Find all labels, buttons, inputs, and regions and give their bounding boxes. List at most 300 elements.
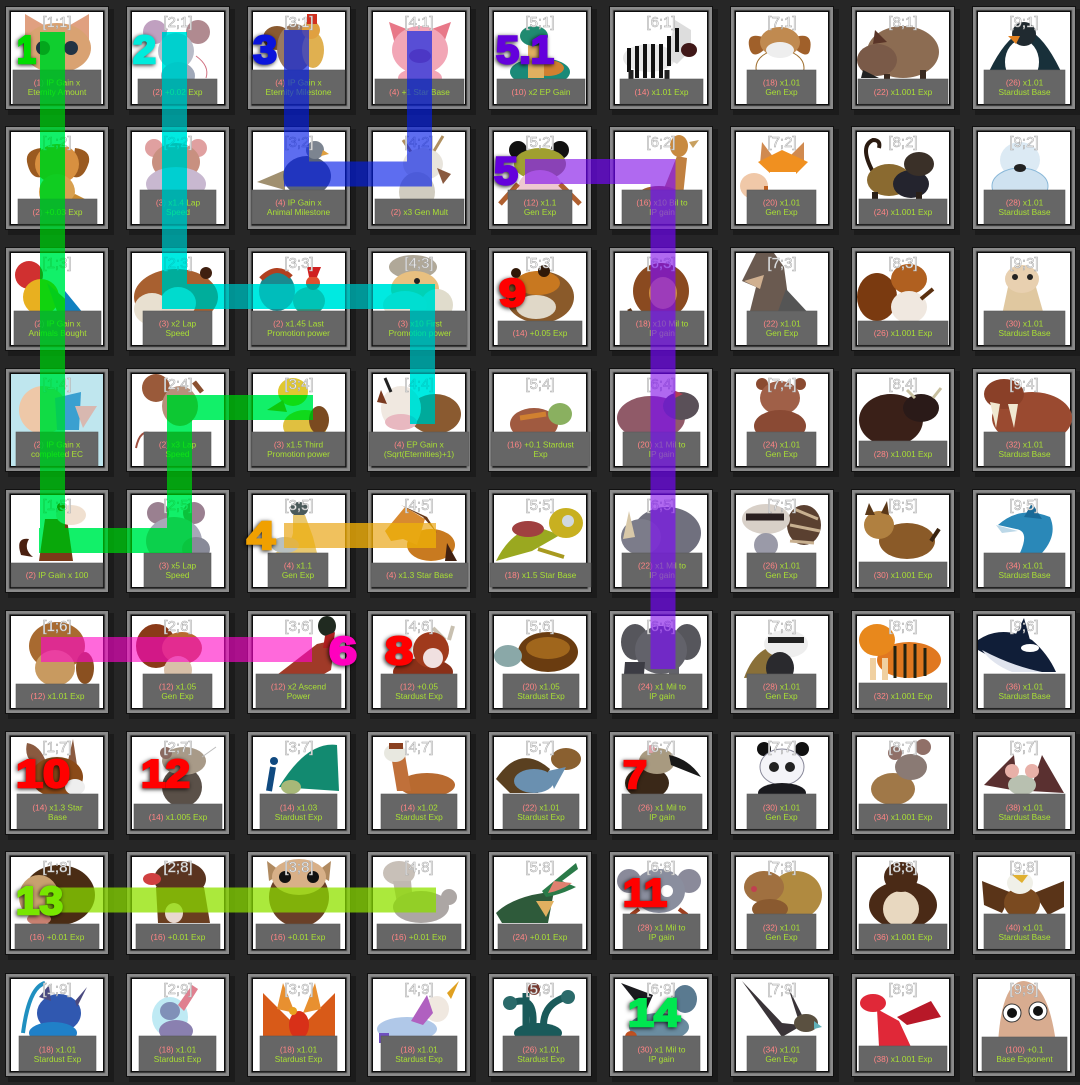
caption: (12) x2 Ascend: [271, 682, 327, 692]
icon: panda: [757, 742, 809, 803]
icon: giraffe: [639, 135, 699, 202]
cell [1;5]: ferret: [6, 490, 114, 598]
icon: chicken: [263, 14, 324, 72]
caption: Gen Exp: [766, 328, 799, 338]
cell [7;1]: rabbit: [730, 6, 839, 115]
cell [7;5]: raccoon: [730, 490, 839, 598]
caption: (26) x1 Mil to: [638, 802, 686, 812]
caption: (16) +0.01 Exp: [271, 932, 326, 942]
index: [7;1]: [767, 14, 797, 31]
index: [8;1]: [888, 14, 918, 31]
caption: IP gain: [649, 328, 675, 338]
index: [4;7]: [404, 739, 434, 756]
index: [8;4]: [888, 376, 918, 393]
icon: lion: [629, 263, 689, 319]
cell [2;7]: rat: [126, 732, 235, 840]
cell [7;2]: fox: [730, 126, 839, 235]
icon: rhino: [621, 507, 701, 559]
cell [1;6]: chipmunk: [6, 610, 114, 719]
caption: (2) +0.02 Exp: [152, 87, 203, 97]
caption: Stardust Exp: [395, 812, 443, 822]
caption: (1) IP Gain x: [34, 78, 81, 88]
caption: Stardust Base: [998, 570, 1051, 580]
icon: tiger: [859, 624, 941, 680]
caption: [984, 190, 1065, 224]
icon: toad: [506, 265, 574, 323]
caption: IP gain: [649, 932, 675, 942]
icon: walrus: [984, 379, 1072, 444]
cell [1;9]: blue cat: [6, 974, 114, 1082]
cell [9;1]: penguin: [972, 6, 1080, 115]
caption: (24) x1 Mil to: [638, 682, 686, 692]
index: [3;9]: [284, 981, 314, 998]
icon: fish: [11, 374, 103, 466]
caption: (22) x1 Mil to: [638, 560, 686, 570]
cell [6;8]: koala: [610, 852, 718, 960]
caption: [252, 70, 345, 104]
icon: blue cat: [23, 983, 87, 1044]
caption: [622, 674, 702, 708]
icon: seal: [1002, 265, 1044, 315]
caption: [984, 432, 1065, 466]
index: [2;7]: [163, 739, 193, 756]
cell [5;6]: tortoise: [488, 610, 597, 719]
path 1: green route: [39, 32, 313, 553]
caption: [747, 70, 816, 104]
icon: pig: [389, 22, 451, 88]
cell [1;1]: cat: [6, 6, 114, 115]
cell [3;9]: phoenix: [248, 974, 356, 1082]
caption: (24) x1.01: [763, 440, 801, 450]
cell [5;9]: hydra: [488, 974, 597, 1082]
index: [6;2]: [646, 134, 676, 151]
caption: IP gain: [649, 207, 675, 217]
cell [7;9]: griffin: [730, 974, 839, 1082]
caption: (3) x10 First: [398, 318, 443, 328]
index: [9;8]: [1009, 859, 1039, 876]
cell [7;4]: bear: [730, 368, 839, 477]
index: [9;5]: [1009, 497, 1039, 514]
index: [6;7]: [646, 739, 676, 756]
caption: Gen Exp: [282, 570, 315, 580]
index: [2;9]: [163, 981, 193, 998]
caption: Stardust Exp: [517, 812, 565, 822]
path 6: magenta route: [41, 637, 312, 662]
caption: (18) x1.01: [280, 1044, 318, 1054]
caption: (32) x1.01: [1006, 440, 1044, 450]
caption: (22) x1.01: [522, 802, 560, 812]
cell [3;4]: duck: [248, 368, 356, 477]
caption: (26) x1.01: [763, 560, 801, 570]
icon: mouse: [136, 374, 202, 448]
cell [5;5]: chameleon: [488, 490, 597, 598]
index: [5;3]: [525, 255, 555, 272]
cell [8;3]: squirrel: [852, 248, 960, 356]
icon: guinea pig: [134, 267, 218, 325]
cell [8;8]: gorilla: [852, 852, 960, 960]
path 2: cyan route: [174, 32, 422, 424]
caption: [16, 432, 98, 466]
index: [3;4]: [284, 376, 314, 393]
caption: Stardust Exp: [395, 691, 443, 701]
caption: [381, 1036, 457, 1071]
index: [4;8]: [404, 859, 434, 876]
index: [2;8]: [163, 859, 193, 876]
icon: hyena: [871, 739, 931, 805]
caption: [622, 190, 702, 224]
caption: (2) IP Gain x 100: [26, 570, 89, 580]
cell [4;9]: unicorn: [368, 974, 476, 1082]
icon: bat: [984, 755, 1064, 795]
cell [6;2]: giraffe: [610, 126, 718, 235]
caption: [381, 794, 457, 829]
index: [5;5]: [525, 497, 555, 514]
cell [5;7]: lizard: [488, 732, 597, 840]
caption: [13, 70, 101, 104]
caption: [373, 311, 467, 345]
icon: pigeon: [257, 141, 331, 196]
caption: (30) x1.001 Exp: [874, 570, 933, 580]
icon: polar bear: [992, 142, 1048, 204]
caption: Stardust Exp: [395, 1054, 443, 1064]
index: [3;5]: [284, 497, 314, 514]
caption: Base Exponent: [996, 1054, 1053, 1064]
caption: (4) x1.3 Star Base: [386, 570, 453, 580]
path 4: orange route: [284, 523, 436, 548]
caption: (16) x10 Bil to: [636, 198, 688, 208]
caption: Promotion power: [389, 328, 452, 338]
icon: hippo: [617, 390, 699, 440]
caption: (18) x1.01: [763, 78, 801, 88]
index: [8;7]: [888, 739, 918, 756]
caption: Stardust Base: [998, 87, 1051, 97]
index: [4;2]: [404, 134, 434, 151]
caption: (3) x2 Lap: [159, 318, 197, 328]
cell [4;4]: cow: [368, 368, 476, 477]
caption: (2) IP Gain x: [34, 318, 82, 328]
icon: griffin: [742, 981, 822, 1037]
caption: [984, 311, 1065, 345]
caption: (12) x1.01 Exp: [31, 691, 85, 701]
cell [3;1]: chicken: [248, 6, 356, 115]
path 13: lime route: [45, 888, 436, 912]
icon: hare: [26, 739, 85, 797]
index: [6;3]: [646, 255, 676, 272]
caption: [620, 311, 704, 345]
caption: [747, 432, 816, 466]
index: [9;9]: [1009, 981, 1039, 998]
index: [6;4]: [646, 376, 676, 393]
index: [9;6]: [1009, 618, 1039, 635]
icon: squirrel: [136, 624, 202, 684]
caption: (28) x1 Mil to: [638, 922, 686, 932]
caption: [747, 1036, 816, 1071]
caption: Gen Exp: [161, 691, 194, 701]
caption: (14) x1.01 Exp: [635, 87, 689, 97]
caption: (38) x1.001 Exp: [874, 1054, 933, 1064]
caption: (16) +0.01 Exp: [30, 932, 85, 942]
index: [5;8]: [525, 859, 555, 876]
index: [6;9]: [646, 981, 676, 998]
caption: [984, 914, 1065, 949]
cell [2;8]: mole: [126, 852, 235, 960]
index: [3;6]: [284, 618, 314, 635]
cell [1;4]: fish: [6, 368, 114, 477]
icon: dolphin: [996, 503, 1053, 553]
caption: Stardust Exp: [517, 691, 565, 701]
cell [2;2]: hamster: [126, 126, 235, 235]
step number 11: 11: [623, 872, 667, 915]
index: [3;1]: [284, 14, 314, 31]
icon: sheep: [383, 255, 453, 321]
caption: (4) IP Gain x: [275, 198, 323, 208]
cell [7;8]: beaver: [730, 852, 839, 960]
caption: Animals Bought: [28, 328, 87, 338]
caption: (38) x1.01: [1006, 802, 1044, 812]
caption: [747, 914, 816, 949]
index: [2;1]: [163, 14, 193, 31]
icon: tortoise: [494, 632, 578, 682]
cell [6;4]: hippo: [610, 368, 718, 477]
caption: [17, 794, 98, 829]
caption: [369, 432, 469, 466]
icon: mouse: [143, 20, 210, 90]
step number 4: 4: [247, 515, 275, 558]
icon: rooster: [259, 267, 325, 315]
index: [8;2]: [888, 134, 918, 151]
index: [7;6]: [767, 618, 797, 635]
caption: Exp: [533, 449, 548, 459]
caption: [747, 553, 816, 587]
cell [3;5]: goose: [248, 490, 356, 598]
index: [5;2]: [525, 134, 555, 151]
icon: llama: [384, 743, 455, 797]
caption: (18) x1.01: [400, 1044, 438, 1054]
caption: [623, 914, 700, 949]
caption: Power: [287, 691, 310, 701]
caption: [14, 311, 101, 345]
caption: (4) EP Gain x: [394, 440, 445, 450]
caption: (30) x1 Mil to: [638, 1044, 686, 1054]
index: [9;3]: [1009, 255, 1039, 272]
index: [9;1]: [1009, 14, 1039, 31]
index: [4;1]: [404, 14, 434, 31]
icon: wolf: [742, 253, 812, 317]
icon: chipmunk: [29, 622, 94, 686]
index: [7;9]: [767, 981, 797, 998]
caption: Stardust Exp: [275, 1054, 323, 1064]
icon: zebra: [623, 20, 697, 80]
cell [2;1]: mouse: [126, 6, 235, 115]
icon: pheasant: [273, 616, 336, 678]
cell [6;6]: elephant: [610, 610, 718, 719]
cell [8;6]: tiger: [852, 610, 960, 719]
icon: duck: [267, 378, 329, 442]
cell [8;1]: boar: [852, 6, 960, 115]
icon: hamster: [145, 139, 207, 201]
cell [1;8]: hedgehog: [6, 852, 114, 960]
icon: jackalope: [152, 985, 198, 1042]
caption: Stardust Exp: [517, 1054, 565, 1064]
icon: beaver: [744, 871, 822, 919]
icon: hydra: [503, 983, 575, 1043]
caption: (24) +0.01 Exp: [513, 932, 568, 942]
caption: (4) IP Gain x: [275, 78, 323, 88]
caption: (28) x1.01: [763, 682, 801, 692]
caption: [623, 1036, 700, 1071]
icon: fox: [740, 142, 808, 199]
icon: bull: [393, 626, 453, 686]
index: [9;4]: [1009, 376, 1039, 393]
caption: Stardust Exp: [34, 1054, 82, 1064]
caption: (16) +0.01 Exp: [392, 932, 447, 942]
cell [1;2]: dog: [6, 126, 114, 235]
cell [9;2]: polar bear: [972, 126, 1080, 235]
index: [7;8]: [767, 859, 797, 876]
caption: [252, 190, 345, 224]
caption: [268, 553, 328, 587]
index: [1;1]: [42, 14, 72, 31]
cell [9;7]: bat: [972, 732, 1080, 840]
caption: [256, 674, 341, 708]
icon: turtle: [510, 403, 572, 440]
cell [4;2]: goat: [368, 126, 476, 235]
caption: (16) +0.01 Exp: [151, 932, 206, 942]
icon: crocodile: [496, 863, 578, 923]
caption: [491, 432, 590, 466]
caption: Stardust Exp: [275, 812, 323, 822]
index: [6;6]: [646, 618, 676, 635]
icon: chinchilla: [146, 502, 210, 565]
caption: (28) x1.001 Exp: [874, 449, 933, 459]
caption: (3) x1.5 Third: [274, 440, 323, 450]
caption: (18) x1.01: [39, 1044, 77, 1054]
caption: (34) x1.01: [763, 1044, 801, 1054]
index: [1;7]: [42, 739, 72, 756]
index: [1;5]: [42, 497, 72, 514]
caption: (2) IP Gain x: [34, 440, 81, 450]
icon: dog: [27, 144, 89, 210]
icon: goat: [399, 136, 451, 212]
caption: (2) x1.45 Last: [273, 318, 325, 328]
cell [5;8]: crocodile: [488, 852, 597, 960]
icon: anteater: [625, 745, 701, 799]
index: [5;9]: [525, 981, 555, 998]
caption: Animal Milestone: [267, 207, 330, 217]
caption: Promotion power: [267, 328, 330, 338]
cell [8;5]: lynx: [852, 490, 960, 598]
index: [9;7]: [1009, 739, 1039, 756]
caption: [747, 794, 816, 829]
caption: (10) x2 EP Gain: [512, 87, 571, 97]
cell [6;9]: pegasus: [610, 974, 718, 1082]
cell [3;6]: pheasant: [248, 610, 356, 719]
icon: eagle: [982, 872, 1064, 919]
caption: [508, 190, 572, 224]
step number 6: 6: [329, 630, 357, 673]
index: [2;4]: [163, 376, 193, 393]
cell [9;9]: googly-eyed blob: [972, 974, 1080, 1082]
caption: IP gain: [649, 691, 675, 701]
index: [3;3]: [284, 255, 314, 272]
caption: (2) +0.03 Exp: [32, 207, 83, 217]
index: [7;3]: [767, 255, 797, 272]
caption: [747, 190, 816, 224]
caption: Speed: [166, 449, 190, 459]
caption: (14) x1.03: [280, 802, 318, 812]
caption: [139, 1036, 216, 1071]
caption: (14) x1.005 Exp: [149, 812, 208, 822]
caption: (24) x1.001 Exp: [874, 207, 933, 217]
caption: (22) x1.001 Exp: [874, 87, 933, 97]
cell [6;3]: lion: [610, 248, 718, 356]
caption: (28) x1.01: [1006, 198, 1044, 208]
caption: (26) x1.01: [1006, 78, 1044, 88]
caption: [503, 1036, 579, 1071]
caption: (12) x1.05: [159, 682, 197, 692]
caption: (14) +0.05 Exp: [513, 328, 568, 338]
cell [2;4]: mouse: [126, 368, 235, 477]
cell [5;2]: frog: [488, 126, 597, 235]
index: [1;9]: [42, 981, 72, 998]
icon: googly-eyed blob: [998, 981, 1056, 1043]
caption: Gen Exp: [765, 812, 798, 822]
caption: Gen Exp: [765, 691, 798, 701]
caption: Speed: [166, 570, 190, 580]
icon: owl: [267, 859, 331, 927]
index: [1;3]: [42, 255, 72, 272]
index: [1;2]: [42, 134, 72, 151]
caption: (2) x3 Gen Mult: [391, 207, 449, 217]
caption: (2) x3 Lap: [159, 440, 197, 450]
cell [7;7]: panda: [730, 732, 839, 840]
icon: unicorn: [377, 981, 459, 1043]
caption: [984, 553, 1065, 587]
icon: cow: [377, 378, 461, 434]
caption: [623, 432, 700, 466]
caption: [381, 674, 457, 708]
index: [8;9]: [888, 981, 918, 998]
caption: Base: [48, 812, 67, 822]
path 3: blue route: [296, 30, 420, 174]
icon: goose: [271, 502, 317, 553]
cell [2;3]: guinea pig: [126, 248, 235, 356]
step number 8: 8: [385, 630, 413, 673]
step number 3: 3: [253, 29, 277, 72]
caption: [140, 190, 216, 224]
cell [4;3]: sheep: [368, 248, 476, 356]
icon: pegasus: [621, 983, 697, 1043]
index: [5;6]: [525, 618, 555, 635]
index: [5;1]: [525, 14, 555, 31]
index: [3;2]: [284, 134, 314, 151]
index: [6;5]: [646, 497, 676, 514]
caption: [622, 553, 702, 587]
icon: parrot: [15, 261, 83, 317]
caption: IP gain: [649, 449, 675, 459]
index: [7;7]: [767, 739, 797, 756]
caption: (14) x1.02: [400, 802, 438, 812]
index: [3;7]: [284, 739, 314, 756]
icon: lynx: [864, 501, 939, 559]
caption: [260, 1036, 337, 1071]
cell [3;3]: rooster: [248, 248, 356, 356]
caption: (20) x1 Mil to: [638, 440, 686, 450]
index: [8;8]: [888, 859, 918, 876]
index: [7;5]: [767, 497, 797, 514]
index: [4;3]: [404, 255, 434, 272]
caption: (12) +0.05: [400, 682, 438, 692]
